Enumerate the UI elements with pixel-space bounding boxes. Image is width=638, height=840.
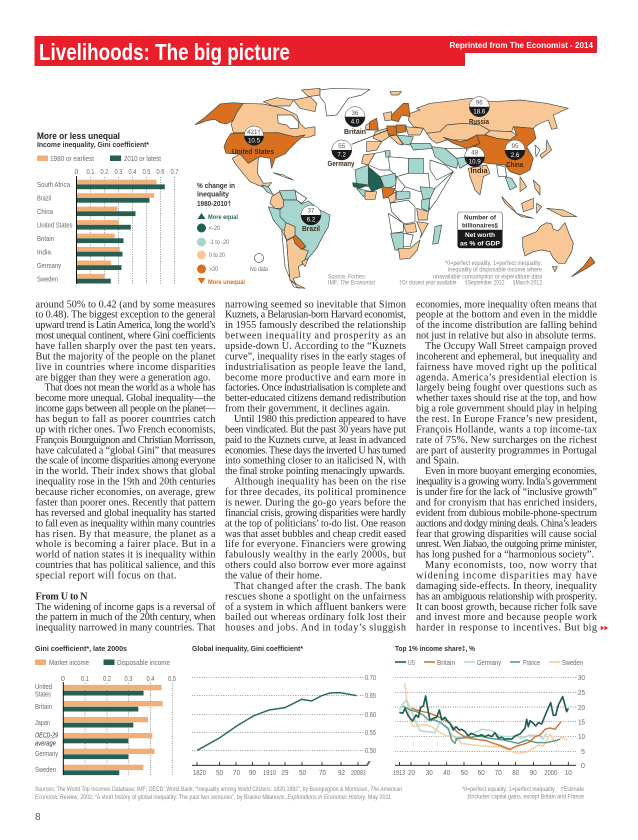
article text: column 2: Until 1980 this prediction appeared to have: [234, 414, 406, 425]
article text: column 1: inequality rose in the 19th and 20th centuries: [36, 477, 216, 488]
article text: column 3: economies, more inequality often means that: [416, 299, 597, 310]
map footnotes: [399, 260, 543, 286]
article text: column 2: is newer. During the go-go years before the: [225, 498, 406, 508]
bar chart: gini late 2000s: Britain: [35, 702, 52, 711]
article text: column 3: Even in more buoyant emerging economies,: [425, 466, 597, 477]
line chart: top 1% income share: 10: [565, 770, 572, 777]
article text: column 1: has risen. By that measure, the planet as a: [36, 529, 216, 540]
chart footnotes: *0=perfect equality; 1=perfect inequality †Estimate: [462, 786, 584, 793]
sources: Sources: The World Top Incomes Database; IMF; OECD; World Bank; “Inequality among World Citizens: 1820-1992”, by Bourguignon & Morrisson, The American: [35, 786, 402, 793]
article text: column 2: at the top of politicians’ to-do list. One reason: [225, 518, 406, 529]
article text: column 1: the pattern in much of the 20th century, when: [36, 612, 216, 623]
article text: column 1: up with richer ones. Two French economists,: [36, 424, 216, 436]
line chart: global inequality: [192, 644, 376, 777]
bar chart: more or less unequal: Britain: [37, 234, 54, 243]
map legend: change in inequality: More unequal: [208, 279, 245, 286]
line chart: top 1% income share: 30: [578, 675, 585, 682]
line chart: top 1% income share: 60: [478, 770, 485, 777]
line chart: top 1% income share: 30: [426, 770, 433, 777]
article text: column 1: upward trend is Latin America, long the world’s: [36, 320, 216, 331]
chart heading: Global inequality, Gini coefficient*: [192, 644, 303, 653]
article text: column 3: rate of 75%. New surcharges on the richest: [416, 435, 597, 446]
bar chart: more or less unequal: United States: [37, 220, 73, 229]
bar chart: gini late 2000s: [35, 644, 176, 775]
bar chart: more or less unequal: 0.4: [128, 169, 137, 176]
bar chart: more or less unequal: India: [37, 247, 51, 256]
bubble: India: [465, 147, 488, 175]
article text: column 1: inequality narrowed in many countries. That: [36, 623, 216, 634]
article text: column 3: It can boost growth, because richer folk save: [416, 602, 597, 613]
article text: column 3: has long pushed for a “harmonious society”.: [416, 550, 594, 561]
article text: column 1: are bigger than they were a generation ago.: [36, 372, 210, 383]
billionaires key: Number of: [464, 214, 497, 222]
article text: column 2: upside-down U. According to the “Kuznets: [225, 341, 406, 352]
map legend: change in inequality: % change in: [197, 183, 235, 190]
article text: column 2: bailed out whereas ordinary folk lost their: [225, 612, 407, 623]
bubble: Russia: [469, 97, 489, 126]
line chart: global inequality: 2008‡: [351, 770, 366, 777]
map legend: change in inequality: inequality: [197, 192, 229, 198]
article text: column 1: That does not mean the world as a whole has: [44, 383, 216, 394]
bubble: Russia: 96: [476, 100, 483, 106]
article text: column 2: rescues shone a spotlight on the unfairness: [225, 591, 406, 602]
article text: column 2: financial crisis, growing disparities were hardly: [225, 508, 407, 519]
bar chart: more or less unequal: Income inequality, Gini coefficient*: [37, 142, 149, 149]
chart heading: Gini coefficient*, late 2000s: [35, 644, 127, 653]
article text: column 3: [416, 299, 598, 634]
world map: Europe, Africa, Asia, Oceania: [320, 88, 595, 277]
article text: column 3: François Hollande, wants a top income-tax: [416, 424, 597, 436]
map legend: change in inequality: 0 to 20: [209, 252, 225, 259]
article text: column 1: The widening of income gaps is a reversal of: [36, 602, 216, 613]
article text: column 3: are part of austerity programmes in Portugal: [416, 445, 597, 456]
bubble: China: [505, 140, 525, 169]
bubble: India: 10.9: [469, 158, 481, 166]
article text: column 3: agenda. America’s presidential election is: [416, 372, 597, 383]
line chart: top 1% income share: [393, 644, 585, 777]
bubble: Britain: 36: [352, 110, 359, 117]
billionaires key: as % of GDP: [460, 240, 500, 248]
billionaires key: billionaires§: [462, 222, 498, 230]
line chart: global inequality: 0.60: [365, 712, 376, 719]
article text: column 1: have calculated a “global Gini” that measures: [36, 445, 216, 456]
bubble: United States: 10.5: [248, 138, 261, 144]
bubble: China: 2.6: [511, 152, 520, 159]
sources: Economic Review, 2002; “A short history of global inequality: The past two centuries”, by Branko Milanovic, Explorations in Economic History, May 2011: [35, 794, 391, 801]
bar chart: more or less unequal: 0.2: [100, 169, 109, 176]
article text: column 1: special report will focus on that.: [36, 570, 176, 582]
map legend: change in inequality: 1980-2010†: [197, 201, 231, 208]
chart heading: Top 1% income share‡, %: [395, 644, 475, 653]
article text: column 3: whether taxes should rise at the top, and how: [416, 393, 598, 404]
article text: column 1: world of nation states it is inequality within: [36, 550, 216, 561]
article text: column 1: live in countries where income disparities: [36, 362, 216, 373]
bubble: Brazil: Brazil: [302, 226, 320, 233]
map footnotes: *0=perfect equality, 1=perfect inequality;: [445, 260, 542, 267]
legend: Britain: [437, 658, 455, 667]
article text: column 3: and Spain.: [416, 456, 459, 467]
bubble: India: India: [470, 168, 488, 175]
line chart: global inequality: ⁄⁄: [365, 761, 371, 768]
bubble: United States: [232, 126, 274, 156]
article text: column 1: have fallen sharply over the past ten years.: [36, 341, 216, 352]
article text: column 3: The Occupy Wall Street campaign proved: [425, 341, 597, 352]
map source: Source: Forbes;: [328, 274, 366, 280]
map source: IMF; The Economist: [328, 280, 375, 286]
bar chart: gini late 2000s: Disposable income: [117, 658, 170, 667]
article text: column 1: because richer economies, on average, grew: [36, 487, 216, 498]
line chart: top 1% income share: 40: [443, 770, 450, 777]
map legend: change in inequality: <-20: [209, 225, 220, 232]
bar chart: gini late 2000s: Sweden: [35, 765, 56, 774]
bubble: Britain: 4.0: [351, 118, 360, 126]
line chart: top 1% income share: 15: [578, 720, 585, 726]
sources: [35, 786, 402, 801]
title: Livelihoods: The big picture: [39, 39, 290, 65]
line chart: global inequality: 50: [299, 770, 306, 777]
article text: column 1: around 50% to 0.42 (and by some measures: [36, 299, 216, 310]
article text: column 3: the rest. In Europe France’s new president,: [416, 414, 597, 425]
line chart: global inequality: 0.70: [365, 675, 376, 682]
bubble: United States: 421†: [247, 129, 261, 136]
map footnotes: †Or closest year available ‡September 2012 §March 2012: [399, 280, 542, 286]
article text: column 3: and invest more and because people work: [416, 612, 598, 623]
line chart: top 1% income share: 70: [495, 770, 502, 777]
bar chart: more or less unequal: 0.7: [170, 169, 179, 176]
callout line: Germany: [352, 130, 388, 144]
article text: column 1: become more unequal. Global inequality—the: [36, 393, 216, 404]
bar chart: more or less unequal: South Africa: [37, 180, 70, 189]
bubble: India: 48: [471, 150, 479, 156]
article text: column 1: faster than poorer ones. Recently that pattern: [36, 498, 216, 508]
article text: column 3: fear that growing disparities will cause social: [416, 529, 597, 540]
article text: column 1: has reversed and global inequality has started: [36, 508, 216, 519]
article text: column 3: and for cronyism that has enriched insiders,: [416, 498, 597, 508]
bar chart: more or less unequal: [37, 131, 179, 284]
legend: US: [408, 658, 415, 667]
bar chart: gini late 2000s: 0.4: [146, 676, 155, 683]
bubble: Britain: [344, 107, 366, 136]
bar chart: more or less unequal: 0.5: [142, 169, 151, 176]
article text: column 3: of the income distribution are falling behind: [416, 320, 597, 331]
header banner: [34, 36, 597, 66]
bar chart: gini late 2000s: States: [35, 690, 51, 698]
page number: 8: [35, 812, 41, 823]
article text: column 3: incoherent and ephemeral, but inequality and: [416, 352, 597, 362]
line chart: top 1% income share: 20: [408, 770, 415, 777]
article text: column 2: industrialisation as people leave the land,: [225, 362, 406, 373]
article text: column 3: big a role government should play in helping: [416, 404, 597, 415]
article text: column 1: to fall even as inequality within many countries: [36, 518, 216, 529]
article text: column 3: harder in response to incentives. But big: [416, 623, 597, 634]
article text: column 2: into something closer to an italicised N, with: [225, 456, 406, 467]
map footnotes: inequality of disposable income where: [448, 266, 543, 274]
map legend: change in inequality: More equal: [208, 214, 238, 221]
article text: column 2: [225, 299, 407, 634]
line chart: top 1% income share: 80: [512, 770, 519, 777]
bubble: Germany: [328, 140, 355, 168]
article text: column 1: in the world. Their index shows that global: [36, 466, 216, 477]
chart footnotes: ‡Includes capital gains, except Britain and France: [467, 794, 584, 800]
article text: column 1: From U to N: [36, 591, 88, 602]
bar chart: gini late 2000s: 0.3: [124, 676, 133, 683]
article text: column 2: houses and jobs. And in today’s sluggish: [225, 623, 406, 634]
article text: column 1: François Bourguignon and Christian Morrisson,: [36, 435, 216, 446]
article text: column 2: fabulously wealthy in the early 2000s, but: [225, 550, 406, 561]
line chart: top 1% income share: 50: [461, 770, 468, 777]
bubble: Russia: 18.6: [473, 108, 486, 116]
article text: column 3: evident from dubious mobile-phone-spectrum: [416, 508, 597, 519]
article text: column 1: to 0.48). The biggest exception to the general: [36, 310, 216, 321]
world map: Americas: [195, 88, 330, 288]
bubble: Germany: Germany: [328, 161, 355, 168]
map legend: change in inequality: -1 to -20: [209, 239, 229, 246]
article text: column 3: damaging side-effects. In theory, inequality: [416, 581, 598, 592]
article text: column 1: the scale of income disparities among everyone: [36, 456, 216, 467]
article text: column 2: Kuznets, a Belarusian-born Harvard economist,: [225, 310, 406, 321]
bubble: United States: United States: [232, 149, 274, 156]
line chart: global inequality: 29: [282, 770, 289, 777]
article text: column 2: That changed after the crash. The bank: [234, 581, 407, 592]
bar chart: more or less unequal: Brazil: [37, 193, 51, 202]
article text: column 2: the value of their home.: [225, 570, 322, 582]
bubble: Russia: Russia: [469, 119, 489, 126]
line chart: global inequality: 70: [319, 770, 326, 777]
article text: column 2: narrowing seemed so inevitable that Simon: [225, 299, 406, 310]
article text: column 1: has begun to fall as poorer countries catch: [36, 414, 216, 425]
article text: column 1: [36, 299, 216, 634]
bubble: China: China: [506, 162, 523, 169]
article text: column 2: economies. These days the inverted U has turned: [225, 445, 406, 456]
bar chart: gini late 2000s: OECD-29: [35, 730, 58, 740]
world map: Australia: [523, 223, 573, 263]
article text: column 2: between inequality and prosperity as an: [225, 331, 406, 342]
bar chart: more or less unequal: 2010 or latest: [124, 154, 161, 163]
article text: column 2: was that asset bubbles and cheap credit eased: [225, 529, 406, 540]
article text: column 3: largely being fought over questions such as: [416, 383, 597, 394]
article text: column 3: fairness have moved right up the political: [416, 362, 597, 373]
article text: column 1: whole is becoming a fairer place. But in a: [36, 539, 216, 550]
article text: column 2: others could also borrow ever more against: [225, 560, 406, 571]
bar chart: gini late 2000s: United: [35, 682, 52, 691]
bubble: Britain: Britain: [344, 129, 366, 136]
legend: Germany: [477, 658, 501, 667]
map footnotes: unavailable consumption or expenditure data: [433, 274, 542, 280]
article text: column 2: from their government, it declines again.: [225, 404, 390, 415]
article text: column 1: most unequal continent, where Gini coefficients: [36, 331, 216, 342]
bar chart: more or less unequal: Germany: [37, 261, 61, 270]
line chart: top 1% income share: 0: [581, 763, 585, 770]
chart footnotes: [462, 786, 584, 800]
article text: column 3: people at the bottom and even in the middle: [416, 310, 597, 321]
legend: [395, 658, 583, 667]
line chart: top 1% income share: 90: [530, 770, 537, 777]
bar chart: more or less unequal: 0.1: [86, 169, 95, 176]
line chart: top 1% income share: 5: [581, 749, 585, 756]
article text: column 2: life for everyone. Financiers were growing: [225, 539, 406, 550]
bar chart: more or less unequal: 0: [75, 169, 79, 176]
line chart: top 1% income share: 2000: [544, 770, 557, 777]
map legend: change in inequality: No data: [250, 266, 268, 273]
article text: column 3: Many economists, too, now worry that: [425, 560, 597, 571]
bar chart: gini late 2000s: average: [35, 738, 56, 748]
article text: column 3: not just in relative but also in absolute terms.: [416, 331, 596, 342]
article text: column 1: income gaps between all people on the planet—: [36, 404, 216, 415]
article text: column 2: for three decades, its political prominence: [225, 487, 406, 498]
legend: France: [523, 658, 540, 667]
line chart: top 1% income share: 10: [578, 734, 585, 741]
bar chart: gini late 2000s: 0.1: [81, 676, 89, 683]
line chart: top 1% income share: 20: [578, 705, 585, 712]
line chart: global inequality: 90: [249, 770, 256, 777]
article text: column 3: is under fire for the lack of “inclusive growth”: [416, 487, 597, 498]
bubble: Brazil: 37: [308, 208, 315, 214]
map legend: change in inequality: [197, 183, 268, 286]
article text: column 2: the final stroke pointing menacingly upwards.: [225, 466, 405, 477]
article text: column 3: inequality is a growing worry. India’s government: [416, 477, 597, 488]
bubble: Brazil: 6.2: [307, 216, 316, 224]
map source: [328, 274, 375, 286]
article text: column 1: But the majority of the people on the planet: [36, 352, 216, 362]
article text: column 2: of a system in which affluent bankers were: [225, 602, 406, 613]
line chart: global inequality: 0.65: [365, 693, 376, 700]
billionaires key: [458, 212, 502, 248]
line chart: global inequality: 1820: [193, 770, 206, 777]
line chart: global inequality: 92: [338, 770, 345, 777]
article text: column 3: widening income disparities may have: [416, 570, 597, 582]
map legend: change in inequality: >20: [209, 266, 218, 273]
line chart: global inequality: 70: [233, 770, 240, 777]
article text: column 2: factories. Once industrialisation is complete and: [225, 383, 406, 394]
article text: column 3: has an ambiguous relationship with prosperity.: [416, 591, 597, 602]
article text: column 2: paid to the Kuznets curve, at least in advanced: [225, 435, 406, 446]
bar chart: gini late 2000s: 0: [61, 676, 65, 683]
legend: Sweden: [562, 658, 583, 667]
article text: column 2: better-educated citizens demand redistribution: [225, 393, 406, 404]
line chart: global inequality: 0.55: [365, 730, 376, 737]
continue arrows: [601, 626, 608, 630]
bar chart: more or less unequal: China: [37, 207, 53, 216]
article text: column 2: become more productive and earn more in: [225, 372, 406, 383]
bar chart: more or less unequal: 0.3: [114, 169, 123, 176]
bubble: Germany: 55: [338, 143, 346, 150]
article text: column 3: unrest. Wen Jiabao, the outgoing prime minister,: [416, 539, 597, 550]
bar chart: gini late 2000s: Japan: [35, 718, 50, 727]
bar chart: more or less unequal: 1980 or earliest: [50, 154, 94, 163]
article text: column 2: been vindicated. But the past 30 years have put: [225, 424, 406, 436]
article text: column 2: in 1955 famously described the relationship: [225, 320, 406, 331]
bar chart: gini late 2000s: 0.5: [168, 676, 176, 683]
article text: column 1: countries that has political salience, and this: [36, 560, 216, 571]
bar chart: more or less unequal: 0.6: [156, 169, 165, 176]
line chart: top 1% income share: 1913: [393, 770, 405, 777]
line chart: top 1% income share: 25: [578, 690, 585, 697]
bar chart: gini late 2000s: Market income: [49, 658, 89, 667]
bar chart: gini late 2000s: Germany: [35, 749, 58, 758]
bar chart: gini late 2000s: 0.2: [103, 676, 111, 683]
bubble: Brazil: [301, 205, 321, 233]
billionaires key: Net worth: [465, 232, 495, 239]
bar chart: more or less unequal: Sweden: [37, 274, 58, 283]
article text: column 2: Although inequality has been on the rise: [234, 477, 406, 488]
heading: More or less unequal: [37, 131, 120, 141]
bubble: China: 95: [512, 143, 519, 150]
line chart: global inequality: 1910: [263, 770, 276, 777]
line chart: global inequality: 0.50: [365, 748, 376, 755]
line chart: global inequality: 50: [216, 770, 223, 777]
bubble: Germany: 7.2: [337, 152, 347, 158]
article text: column 3: auctions and dodgy mining deals. China’s leaders: [416, 518, 597, 529]
article text: column 2: curve”, inequality rises in the early stages of: [225, 352, 407, 362]
reprint note: Reprinted from The Economist - 2014: [450, 41, 594, 50]
